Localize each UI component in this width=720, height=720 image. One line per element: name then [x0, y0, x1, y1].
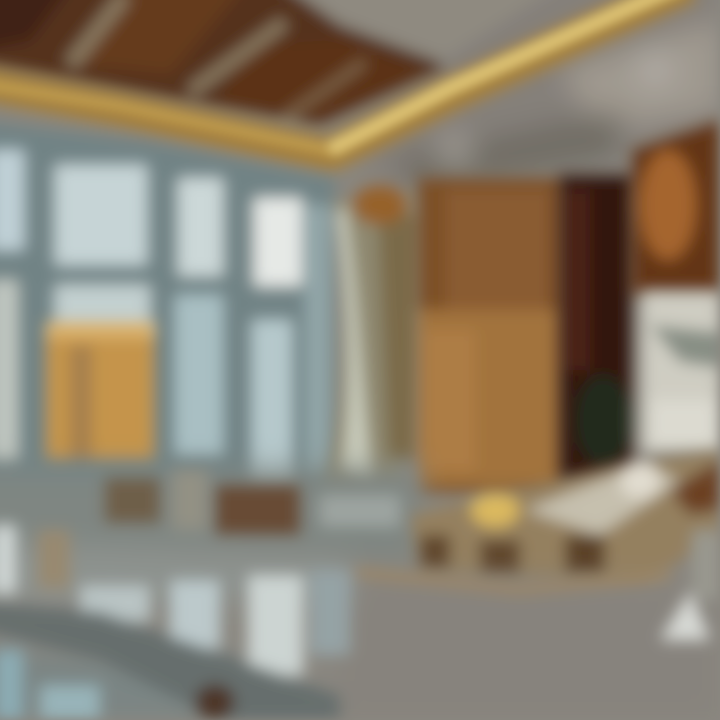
orange building seen through window: [46, 322, 154, 460]
dark column and plant: [560, 175, 632, 485]
wood panelled wall: [418, 178, 563, 493]
ceiling: golden light cove: [0, 0, 690, 155]
right wood panel with lamp glow: [632, 120, 720, 295]
ceiling: wooden coffers: [0, 0, 600, 125]
wall artwork: [642, 292, 720, 452]
table edge and floor reflections: [0, 525, 720, 720]
curtain: [320, 185, 418, 490]
polished floor: [0, 530, 720, 720]
ceiling: upper right grey: [300, 0, 720, 190]
window wall: [0, 118, 335, 515]
seating area: [0, 470, 420, 560]
